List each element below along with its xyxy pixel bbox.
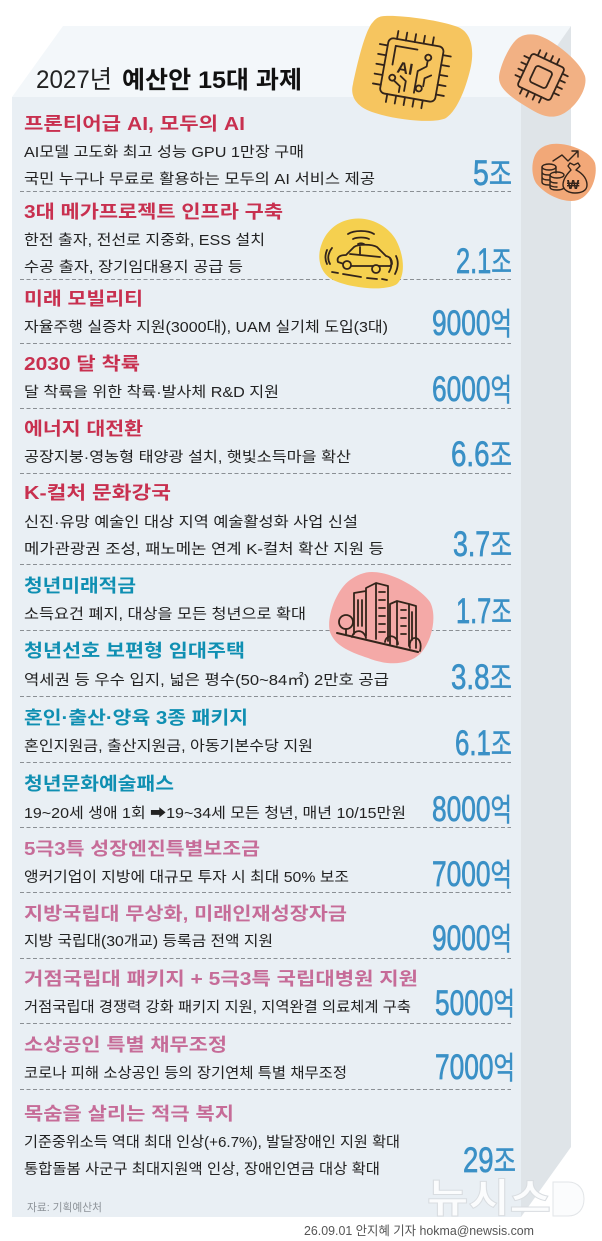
item 1: 5조 bbox=[473, 154, 512, 193]
item 13: 거점국립대 경쟁력 강화 패키지 지원, 지역완결 의료체계 구축 bbox=[24, 999, 411, 1016]
item 6: 신진·유망 예술인 대상 지역 예술활성화 사업 신설 bbox=[24, 514, 358, 531]
icon: coins and money bag bbox=[532, 144, 596, 201]
item 13: 거점국립대 패키지 + 5극3특 국립대병원 지원 bbox=[24, 969, 418, 989]
item 3: 자율주행 실증차 지원(3000대), UAM 실기체 도입(3대) bbox=[24, 319, 388, 336]
icon: processor chip bbox=[499, 34, 586, 117]
watermark: newsis: 뉴시스 bbox=[427, 1177, 551, 1221]
item 2 bbox=[24, 202, 512, 281]
item 5: 에너지 대전환 bbox=[24, 419, 143, 439]
item 3 bbox=[24, 289, 512, 343]
item 7: 1.7조 bbox=[456, 592, 512, 631]
item 1: AI모델 고도화 최고 성능 GPU 1만장 구매 bbox=[24, 144, 304, 161]
icon: AI chip: AI bbox=[395, 60, 414, 79]
credit line: 26.09.01 안지혜 기자 hokma@newsis.com bbox=[304, 1224, 534, 1238]
item 7: 소득요건 폐지, 대상을 모든 청년으로 확대 bbox=[24, 606, 306, 623]
item 7 bbox=[24, 576, 512, 631]
item 15: 통합돌봄 사군구 최대지원액 인상, 장애인연금 대상 확대 bbox=[24, 1161, 380, 1178]
source note: 자료: 기획예산처 bbox=[27, 1201, 102, 1214]
item 7: 청년미래적금 bbox=[24, 576, 136, 596]
item 8: 역세권 등 우수 입지, 넓은 평수(50~84㎡) 2만호 공급 bbox=[24, 672, 389, 689]
panel: box right side bbox=[521, 26, 571, 1217]
item 15 bbox=[24, 1104, 516, 1180]
item 2: 2.1조 bbox=[456, 242, 512, 281]
item 10: 청년문화예술패스 bbox=[24, 774, 174, 794]
item 9: 6.1조 bbox=[455, 724, 512, 763]
item 15: 목숨을 살리는 적극 복지 bbox=[24, 1104, 234, 1124]
item 11: 앵커기업이 지방에 대규모 투자 시 최대 50% 보조 bbox=[24, 869, 349, 886]
item 6 bbox=[24, 483, 512, 564]
item 11: 5극3특 성장엔진특별보조금 bbox=[24, 839, 260, 859]
item 2: 한전 출자, 전선로 지중화, ESS 설치 bbox=[24, 232, 265, 249]
item 9 bbox=[24, 708, 512, 763]
title bbox=[36, 66, 302, 94]
item 14: 코로나 피해 소상공인 등의 장기연체 특별 채무조정 bbox=[24, 1065, 347, 1082]
item 12: 지방국립대 무상화, 미래인재성장자금 bbox=[24, 904, 347, 924]
item 4: 2030 달 착륙 bbox=[24, 354, 140, 374]
item 13: 5000억 bbox=[435, 984, 515, 1023]
title: 예산안 15대 과제 bbox=[122, 67, 302, 94]
item 1 bbox=[24, 114, 512, 193]
item 15: 기준중위소득 역대 최대 인상(+6.7%), 발달장애인 지원 확대 bbox=[24, 1134, 400, 1151]
item 6: 메가관광권 조성, 패노메논 연계 K-컬처 확산 지원 등 bbox=[24, 541, 384, 558]
icon: AI chip bbox=[352, 16, 472, 121]
item 8: 청년선호 보편형 임대주택 bbox=[24, 641, 245, 661]
item 4: 달 착륙을 위한 착륙·발사체 R&D 지원 bbox=[24, 384, 279, 401]
item 14: 소상공인 특별 채무조정 bbox=[24, 1035, 227, 1055]
item 1: 국민 누구나 무료로 활용하는 모두의 AI 서비스 제공 bbox=[24, 171, 375, 188]
item 11 bbox=[24, 839, 512, 894]
item 10: 8000억 bbox=[432, 790, 512, 829]
icon: apartment buildings bbox=[329, 572, 433, 663]
item 9: 혼인지원금, 출산지원금, 아동기본수당 지원 bbox=[24, 738, 313, 755]
item 4: 6000억 bbox=[432, 370, 512, 409]
item 15: 29조 bbox=[463, 1141, 516, 1180]
item 13 bbox=[24, 969, 515, 1023]
item 12 bbox=[24, 904, 512, 958]
item 12: 9000억 bbox=[432, 919, 512, 958]
item 14: 7000억 bbox=[435, 1048, 515, 1087]
item 8 bbox=[24, 641, 512, 697]
item 3: 9000억 bbox=[432, 304, 512, 343]
item 2: 수공 출자, 장기임대용지 공급 등 bbox=[24, 259, 243, 276]
item 12: 지방 국립대(30개교) 등록금 전액 지원 bbox=[24, 933, 273, 950]
item 1: 프론티어급 AI, 모두의 AI bbox=[24, 114, 245, 134]
title: 2027년 bbox=[36, 66, 112, 94]
item 5: 6.6조 bbox=[451, 435, 512, 474]
item 9: 혼인·출산·양육 3종 패키지 bbox=[24, 708, 248, 728]
item 5: 공장지붕·영농형 태양광 설치, 햇빛소득마을 확산 bbox=[24, 449, 351, 466]
item 10: 19~20세 생애 1회 ➡19~34세 모든 청년, 매년 10/15만원 bbox=[24, 805, 406, 822]
icon: coins and money bag: ₩ bbox=[567, 177, 580, 192]
icon: self-driving car bbox=[319, 218, 403, 288]
item 3: 미래 모빌리티 bbox=[24, 289, 143, 309]
item 11: 7000억 bbox=[432, 855, 512, 894]
panel: box top face bbox=[12, 26, 571, 97]
item 8: 3.8조 bbox=[451, 658, 512, 697]
item 5 bbox=[24, 419, 512, 474]
item 14 bbox=[24, 1035, 515, 1087]
panel: box front bbox=[12, 97, 521, 1217]
item 10 bbox=[24, 774, 512, 829]
item 6: 3.7조 bbox=[453, 525, 512, 564]
item 2: 3대 메가프로젝트 인프라 구축 bbox=[24, 202, 283, 222]
item 4 bbox=[24, 354, 512, 409]
item 6: K-컬처 문화강국 bbox=[24, 483, 171, 503]
